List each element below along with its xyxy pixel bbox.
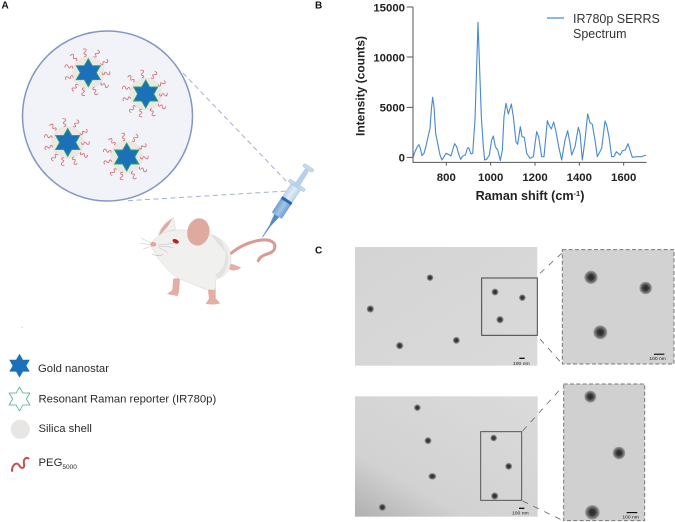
zoom connector lines	[523, 253, 562, 520]
right ear	[184, 216, 212, 248]
rear leg	[206, 287, 220, 305]
magnified nanoparticle circle	[22, 31, 192, 201]
x axis title: -1	[574, 189, 580, 198]
TEM inset top: 100 nm	[649, 356, 666, 362]
panel label A: A	[2, 0, 9, 12]
icon: syringe	[254, 161, 317, 243]
y tick labels: 0	[399, 152, 405, 164]
left ear	[158, 217, 176, 237]
icon: Raman reporter star	[9, 387, 30, 411]
x tick labels: 1400	[567, 172, 592, 184]
nanoparticle 1	[65, 49, 110, 96]
TEM image bottom	[355, 396, 538, 517]
x tick labels: 1600	[611, 172, 636, 184]
y tick labels	[373, 2, 405, 164]
TEM image top: 100 nm	[513, 361, 530, 367]
icon: PEG	[12, 458, 28, 471]
legend text: PEG5000: 5000	[62, 464, 77, 471]
TEM image top	[355, 247, 537, 367]
axes	[407, 7, 647, 166]
eye	[172, 238, 180, 245]
chart legend: Spectrum	[573, 27, 626, 41]
legend text: Raman reporter: Resonant Raman reporter (IR780p)	[38, 394, 216, 406]
chart legend	[547, 12, 660, 41]
panel label C: C	[315, 246, 322, 256]
y tick labels: 10000	[373, 52, 405, 64]
spectrum line	[413, 22, 646, 161]
nanoparticle 4	[103, 133, 148, 180]
icon: silica shell	[11, 420, 30, 439]
nanoparticle 3	[44, 119, 89, 165]
tail	[231, 240, 275, 261]
legend text: silica shell: Silica shell	[38, 423, 92, 435]
legend	[9, 354, 216, 471]
x tick labels: 1000	[478, 172, 503, 184]
zoom dashed lines	[128, 73, 288, 201]
illustration: mouse	[140, 216, 275, 305]
whiskers	[140, 238, 174, 256]
icon: gold nanostar	[9, 354, 30, 378]
TEM inset bottom: 100 nm	[622, 515, 639, 521]
TEM inset top	[562, 250, 674, 364]
x tick labels: 800	[437, 172, 456, 184]
legend text: gold nanostar: Gold nanostar	[38, 363, 109, 375]
chart legend: IR780p SERRS	[573, 12, 660, 26]
nanoparticle 2	[122, 70, 167, 117]
nose	[150, 242, 156, 247]
y tick labels: 15000	[373, 2, 405, 14]
back foot	[229, 263, 241, 271]
y axis title: Intensity (counts)	[354, 36, 368, 136]
panel label B: B	[315, 0, 322, 12]
TEM image bottom: 100 nm	[512, 511, 529, 517]
panel: TEM micrographs	[355, 247, 674, 521]
legend text: PEG5000: PEG	[38, 457, 62, 469]
chart: Raman spectrum	[354, 2, 660, 203]
x axis title: )	[580, 189, 584, 203]
y tick labels: 5000	[380, 102, 405, 114]
front leg	[167, 278, 180, 296]
x tick labels: 1200	[522, 172, 548, 184]
x axis title: Raman shift (cm	[476, 189, 574, 203]
x tick labels	[437, 172, 636, 184]
TEM inset bottom	[564, 384, 645, 521]
body	[151, 230, 231, 290]
